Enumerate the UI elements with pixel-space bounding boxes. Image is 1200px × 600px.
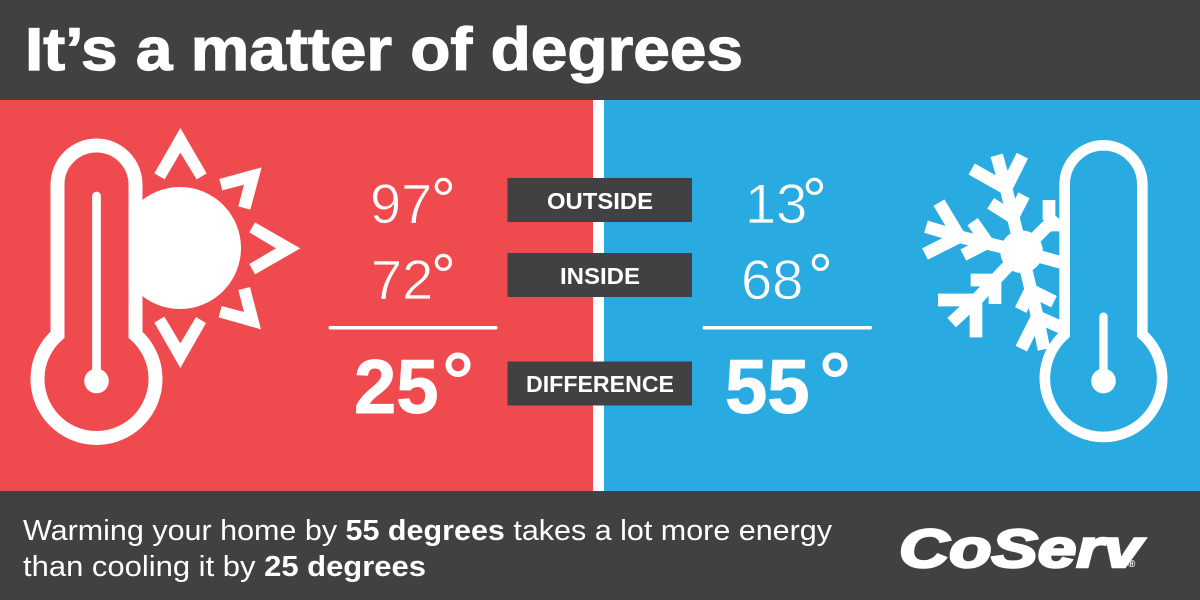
inside temperature cold: ° [808, 242, 833, 311]
label: inside: INSIDE [560, 263, 640, 289]
caption text: than cooling it by 25 degrees [23, 551, 426, 583]
difference cold [725, 336, 851, 430]
hot rule [328, 326, 498, 330]
icon: hot thermometer [37, 146, 156, 438]
outside temperature hot: 97 [370, 172, 432, 235]
inside temperature hot [371, 242, 456, 311]
label: inside [508, 253, 692, 297]
difference hot: 25 [354, 345, 439, 430]
inside temperature hot: 72 [371, 248, 433, 311]
panel: hot side [0, 100, 593, 491]
outside temperature cold: 13 [745, 172, 807, 235]
logo: CoServ: ® [1128, 559, 1136, 570]
difference cold: 55 [725, 345, 810, 430]
caption text: Warming your home by 55 degrees takes a lot more energy [23, 515, 833, 547]
difference hot [354, 336, 474, 430]
logo: CoServ: CoServ [899, 519, 1146, 579]
icon: sun [119, 128, 300, 368]
caption text [23, 515, 833, 583]
label: outside: OUTSIDE [547, 188, 653, 214]
icon: cold thermometer [1045, 145, 1162, 437]
inside temperature cold [741, 242, 833, 311]
icon: snowflake [925, 155, 1067, 349]
difference cold: ° [819, 336, 851, 425]
label: difference: DIFFERENCE [526, 371, 674, 397]
label: difference [508, 362, 692, 406]
inside temperature hot: ° [431, 242, 456, 311]
outside temperature cold: ° [802, 166, 827, 235]
title: It’s a matter of degrees [25, 16, 743, 83]
difference hot: ° [442, 336, 474, 425]
outside temperature hot [370, 166, 456, 235]
icon: sun and hot thermometer [37, 128, 300, 438]
inside temperature cold: 68 [741, 248, 803, 311]
cold rule [702, 326, 872, 330]
outside temperature hot: ° [431, 166, 456, 235]
divider [593, 100, 604, 491]
icon: snowflake and cold thermometer [925, 145, 1162, 437]
label: outside [508, 178, 692, 222]
panel: cold side [604, 100, 1200, 491]
outside temperature cold [745, 166, 827, 235]
